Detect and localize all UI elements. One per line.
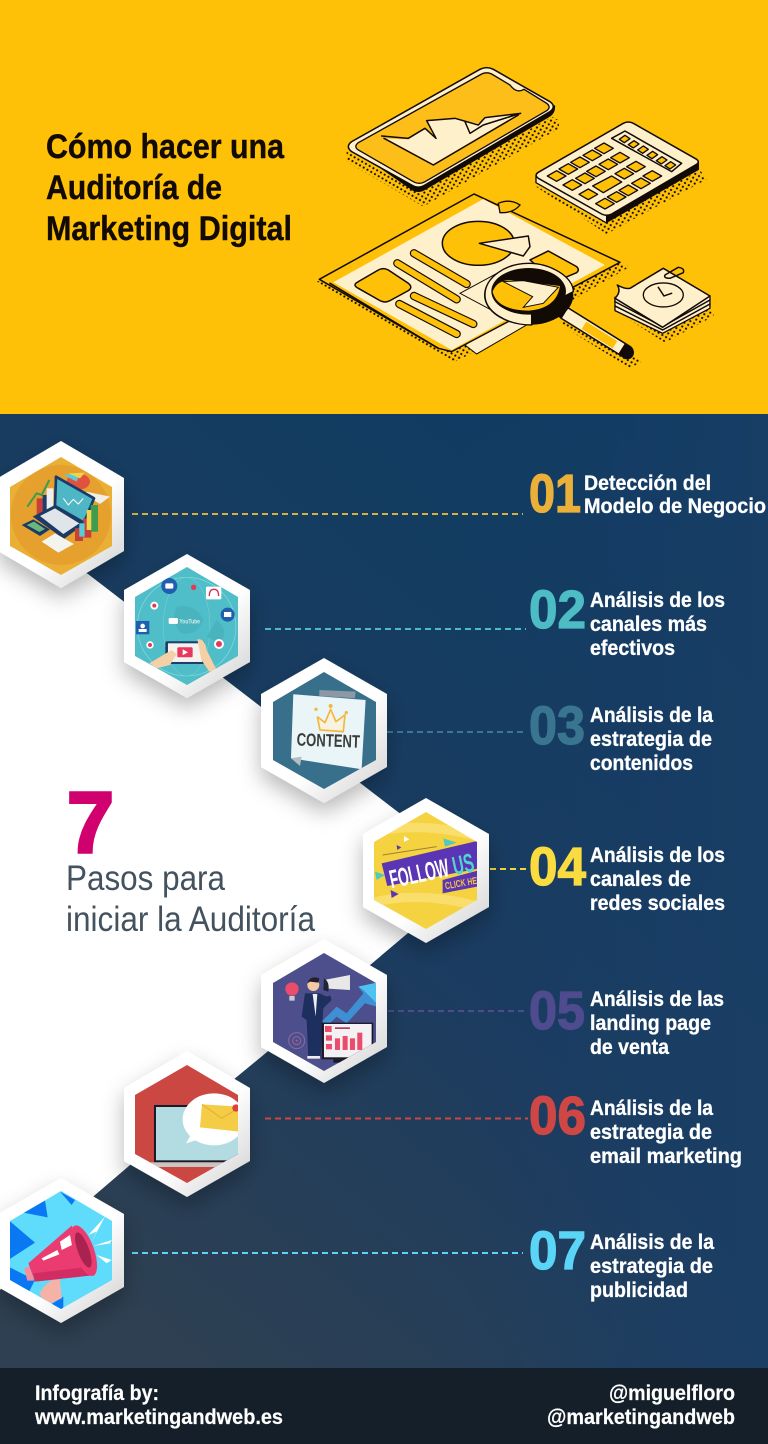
step 02: canales más bbox=[590, 613, 707, 636]
step 04: redes sociales bbox=[590, 892, 725, 915]
step 04: 04 bbox=[529, 837, 586, 897]
step 03: contenidos bbox=[590, 752, 693, 775]
step 02: Análisis de los bbox=[590, 589, 725, 612]
footer bbox=[0, 1368, 768, 1444]
step 01: 01 bbox=[529, 464, 581, 524]
connector line 7 bbox=[132, 1252, 523, 1254]
heading: 7 steps: Pasos para bbox=[66, 859, 225, 898]
step 07 bbox=[529, 1221, 714, 1302]
hexagon 5: landing page bbox=[261, 939, 387, 1083]
connector line 2 bbox=[265, 628, 526, 630]
step 03: estrategia de bbox=[590, 728, 712, 751]
hexagon 3: content: CONTENT bbox=[296, 730, 360, 752]
title: Cómo hacer una bbox=[46, 128, 285, 166]
icon: clock note pad bbox=[615, 267, 714, 343]
hexagon 4: social networks: US bbox=[450, 847, 477, 881]
step 05: Análisis de las bbox=[590, 988, 724, 1011]
heading: 7 steps bbox=[66, 775, 315, 939]
title bbox=[46, 128, 292, 248]
step 07: publicidad bbox=[590, 1279, 688, 1302]
hexagon 1: business model bbox=[0, 441, 124, 588]
hexagon 3: content bbox=[261, 658, 387, 803]
step 06: estrategia de bbox=[590, 1121, 712, 1144]
icon: smartphone with chart bbox=[347, 68, 559, 207]
step 06: Análisis de la bbox=[590, 1097, 713, 1120]
icon: documents with pie chart bbox=[317, 194, 630, 363]
step 06: email marketing bbox=[590, 1145, 742, 1168]
step 03: 03 bbox=[529, 696, 585, 756]
step 02 bbox=[529, 580, 725, 660]
step 05: landing page bbox=[590, 1012, 711, 1035]
heading: 7 steps: iniciar la Auditoría bbox=[66, 900, 315, 939]
step 05: 05 bbox=[529, 981, 585, 1041]
title: Auditoría de bbox=[46, 169, 222, 207]
step 01 bbox=[529, 464, 766, 524]
footer: @marketingandweb bbox=[547, 1406, 735, 1429]
connector line 5 bbox=[388, 1010, 527, 1012]
step 05: de venta bbox=[590, 1036, 669, 1059]
step 04 bbox=[529, 837, 725, 915]
hexagon 7: advertising bbox=[0, 1178, 124, 1323]
connector line 6 bbox=[265, 1118, 528, 1120]
panel: white zigzag area bbox=[0, 530, 482, 1290]
hexagon 4: social networks: CLICK HERE bbox=[444, 874, 487, 892]
connector line 3 bbox=[387, 731, 526, 733]
step 07: estrategia de bbox=[590, 1255, 713, 1278]
step 05 bbox=[529, 981, 724, 1059]
step 07: Análisis de la bbox=[590, 1231, 714, 1254]
step 02: 02 bbox=[529, 580, 586, 640]
panel: dark navy main background bbox=[0, 414, 768, 1368]
hexagon 4: social networks: FOLLOW bbox=[387, 852, 452, 894]
footer: Infografía by: bbox=[35, 1382, 159, 1405]
title: Marketing Digital bbox=[46, 210, 292, 248]
icon: calculator bbox=[536, 122, 707, 234]
step 03: Análisis de la bbox=[590, 704, 713, 727]
icon: magnifying glass bbox=[484, 263, 642, 368]
connector line 1 bbox=[132, 513, 523, 515]
hexagon 6: email marketing bbox=[124, 1051, 250, 1197]
hexagon 4: social networks bbox=[363, 798, 489, 943]
step 01: Detección del bbox=[584, 472, 711, 495]
step 07: 07 bbox=[529, 1221, 586, 1281]
heading: 7 steps: 7 bbox=[67, 775, 114, 871]
footer: @miguelfloro bbox=[609, 1382, 735, 1405]
step 02: efectivos bbox=[590, 637, 675, 660]
footer: www.marketingandweb.es bbox=[34, 1406, 283, 1429]
step 06: 06 bbox=[529, 1086, 586, 1146]
panel: yellow header bbox=[0, 0, 768, 414]
step 06 bbox=[529, 1086, 742, 1168]
hexagon 2: channels: YouTube bbox=[179, 620, 201, 626]
step 03 bbox=[529, 696, 713, 775]
hexagon 2: channels bbox=[124, 554, 250, 698]
connector line 4 bbox=[490, 868, 530, 870]
step 04: canales de bbox=[590, 868, 691, 891]
step 04: Análisis de los bbox=[590, 844, 725, 867]
illustration: isometric office items bbox=[317, 68, 714, 368]
